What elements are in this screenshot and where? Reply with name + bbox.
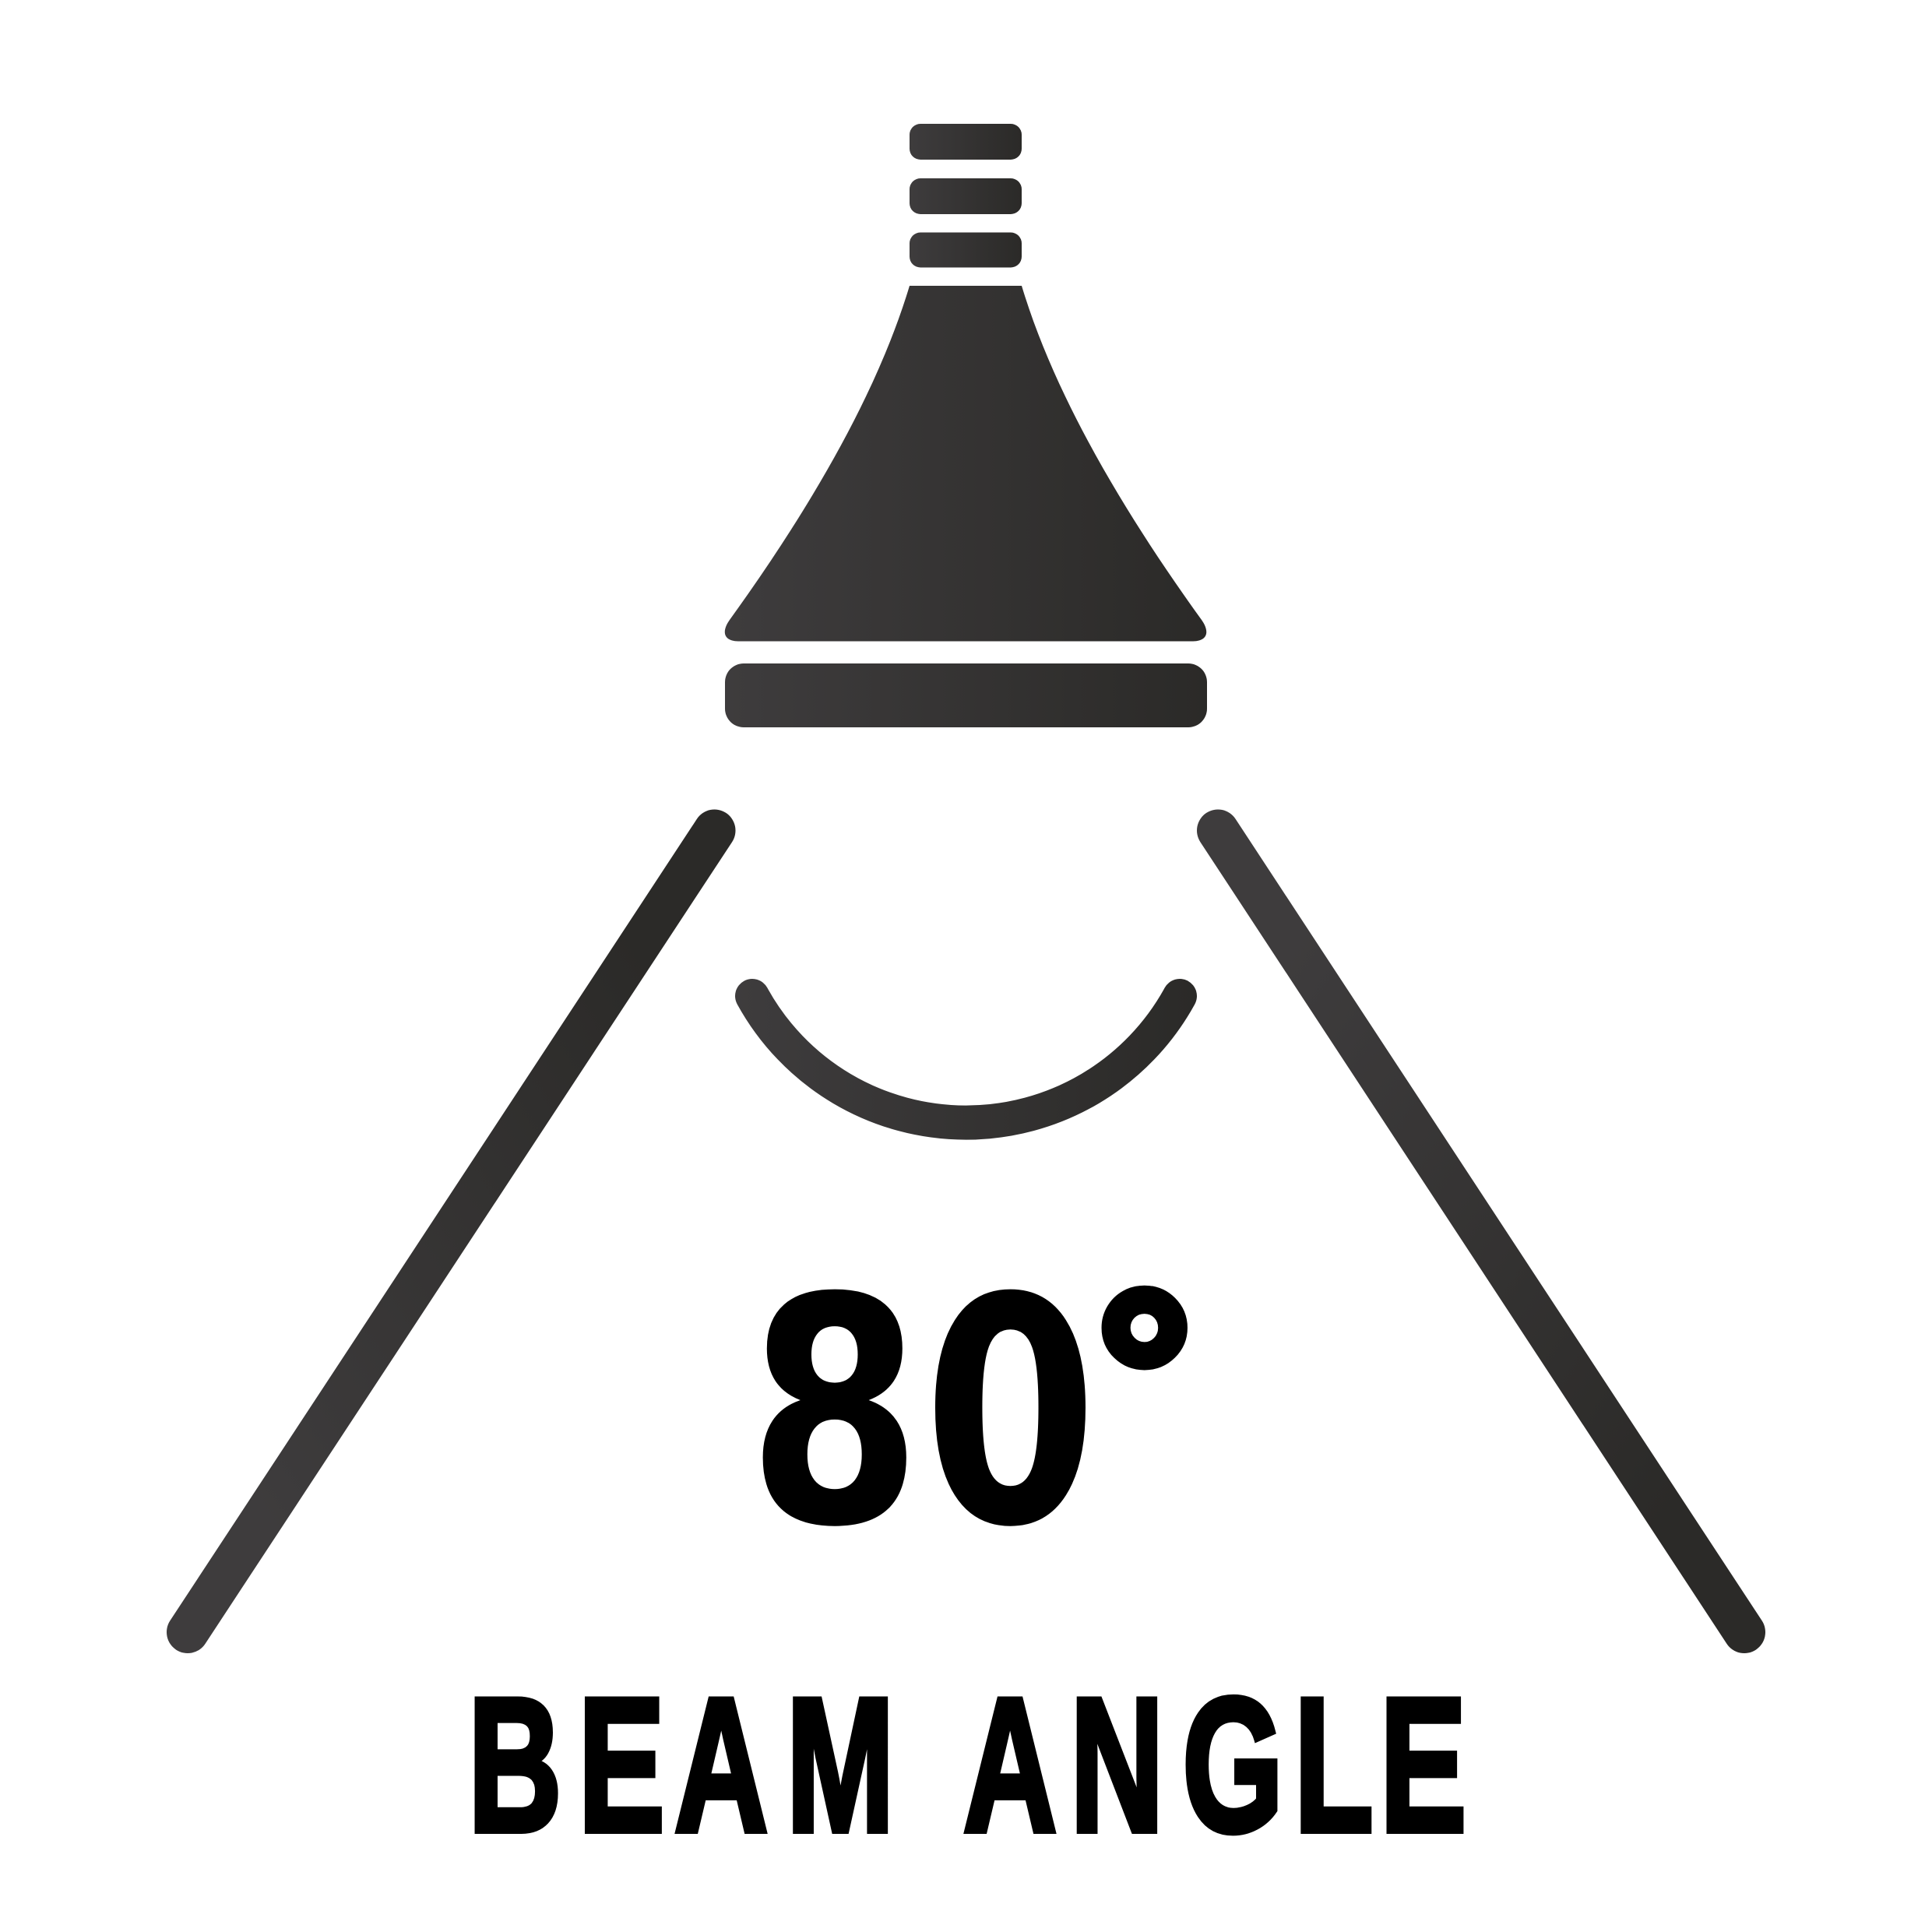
angle value [748,1231,1192,1596]
lamp shade [725,286,1206,642]
right beam line [1218,830,1744,1632]
lamp neck ring 2 [910,178,1022,214]
label: beam angle: BEAM ANGLE [468,1659,1466,1872]
digits: 80 [748,1231,1097,1596]
lamp base bar [725,663,1207,727]
degree sign: ° [1096,1241,1192,1509]
lamp neck ring 3 [910,232,1022,268]
angle arc [752,996,1180,1123]
left beam line [188,830,715,1632]
icon: spot lamp [725,124,1207,727]
lamp neck ring 1 [910,124,1022,160]
